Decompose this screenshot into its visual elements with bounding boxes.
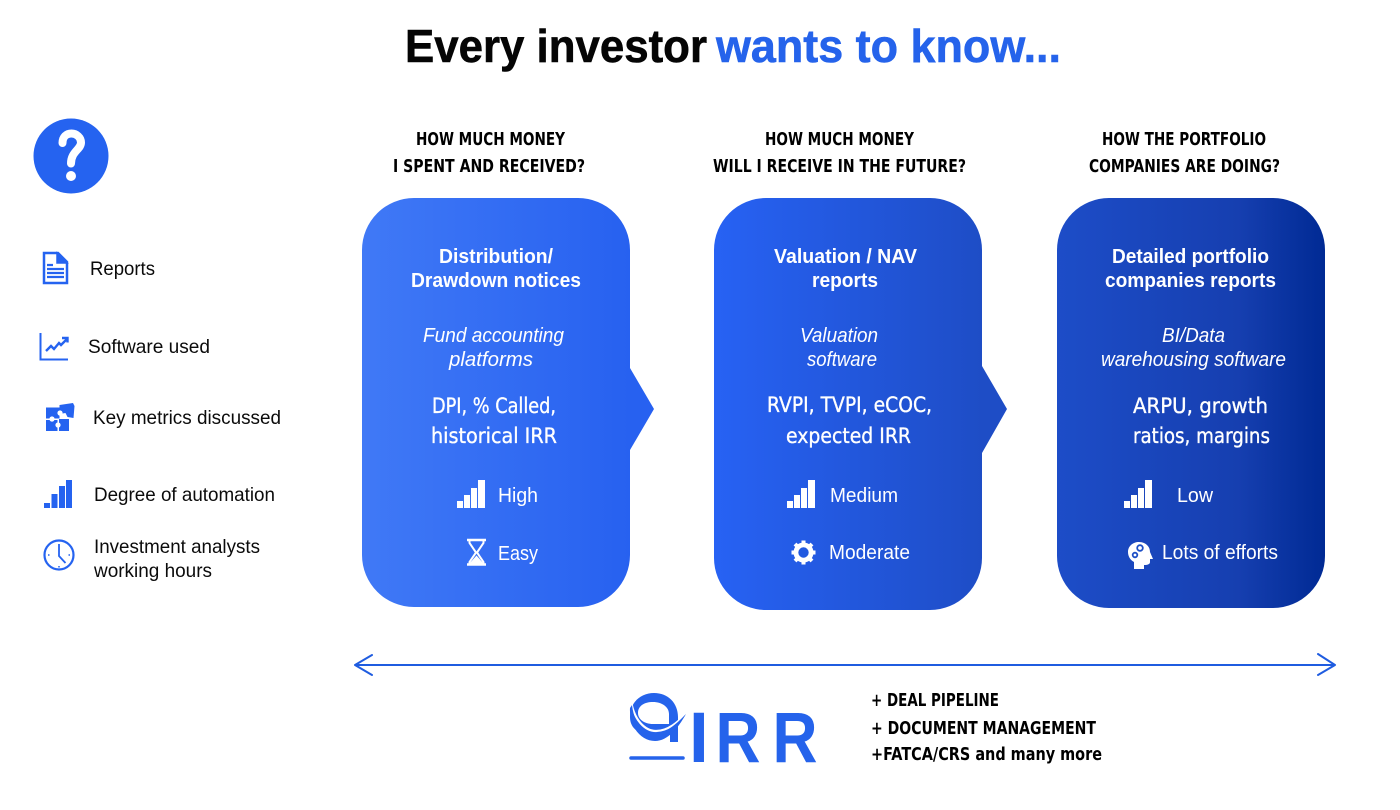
metrics xyxy=(1133,394,1270,448)
heading: reports xyxy=(812,270,878,292)
panel: portfolio companies reports xyxy=(1057,198,1325,608)
text block: additional features: +FATCA/CRS and many more xyxy=(871,744,1102,765)
legend: reports xyxy=(44,253,155,283)
question: future money: HOW MUCH MONEY xyxy=(765,130,914,150)
legend: investment analysts working hours xyxy=(44,536,260,582)
software xyxy=(1101,325,1286,371)
hours: lots of efforts: Lots of efforts xyxy=(1162,542,1278,564)
icon: question mark xyxy=(34,118,108,194)
legend panel xyxy=(34,118,281,582)
metrics: ratios, margins xyxy=(1133,424,1270,448)
question: money spent and received: I SPENT AND RECEIVED? xyxy=(393,157,585,177)
legend: degree of automation: Degree of automation xyxy=(94,484,275,506)
software: BI/Data xyxy=(1162,325,1225,347)
text block: additional features: + DEAL PIPELINE xyxy=(871,690,999,711)
metrics xyxy=(431,394,557,448)
legend: reports: Reports xyxy=(90,258,155,280)
question: future money xyxy=(713,130,966,177)
metrics: RVPI, TVPI, eCOC, xyxy=(767,393,932,417)
question: future money: WILL I RECEIVE IN THE FUTURE? xyxy=(713,157,966,177)
metrics: expected IRR xyxy=(786,424,911,448)
metrics: DPI, % Called, xyxy=(432,394,556,418)
automation: medium: Medium xyxy=(830,485,898,507)
automation: low xyxy=(1124,480,1214,508)
software: Fund accounting xyxy=(423,325,564,347)
title xyxy=(405,20,1061,72)
metrics xyxy=(767,393,932,448)
title: Every investor xyxy=(405,20,707,72)
heading: Valuation / NAV xyxy=(774,246,918,268)
question: portfolio companies xyxy=(1089,130,1280,177)
logo wordmark: R xyxy=(716,699,760,778)
automation: low: Low xyxy=(1177,485,1214,507)
heading xyxy=(1105,246,1276,292)
arrow: double-headed range xyxy=(355,654,1335,675)
logo wordmark xyxy=(689,699,818,778)
logo wordmark: R xyxy=(772,699,818,778)
logo wordmark: I xyxy=(689,699,709,778)
hours: moderate xyxy=(792,540,910,564)
automation: high xyxy=(457,480,538,508)
automation: medium xyxy=(787,480,898,508)
automation: high: High xyxy=(498,485,538,507)
question: money spent and received xyxy=(393,130,585,177)
heading xyxy=(411,246,581,292)
software: Valuation xyxy=(800,325,878,347)
legend: software used xyxy=(40,333,210,360)
heading: Drawdown notices xyxy=(411,270,581,292)
heading: Distribution/ xyxy=(439,246,553,268)
logo: QIRR xyxy=(630,693,818,778)
metrics: ARPU, growth xyxy=(1133,394,1268,418)
software xyxy=(423,325,564,371)
hours: lots of efforts xyxy=(1128,542,1278,569)
legend: degree of automation xyxy=(44,480,275,508)
question: portfolio companies: COMPANIES ARE DOING? xyxy=(1089,157,1280,177)
hours: easy xyxy=(467,540,538,565)
question: money spent and received: HOW MUCH MONEY xyxy=(416,130,565,150)
legend: key metrics discussed: Key metrics discussed xyxy=(93,407,281,429)
hours: moderate: Moderate xyxy=(829,542,910,564)
text block: additional features xyxy=(871,690,1102,765)
heading: Detailed portfolio xyxy=(1112,246,1269,268)
question: portfolio companies: HOW THE PORTFOLIO xyxy=(1102,130,1266,150)
panel: valuation reports xyxy=(714,198,1007,610)
software xyxy=(800,325,878,371)
title: wants to know... xyxy=(715,20,1061,72)
hours: easy: Easy xyxy=(498,543,538,565)
software: software xyxy=(807,349,877,371)
icon: logo ring xyxy=(630,693,687,758)
legend: key metrics discussed xyxy=(46,403,281,431)
text block: additional features: + DOCUMENT MANAGEMENT xyxy=(871,718,1097,739)
heading xyxy=(774,246,918,292)
legend: investment analysts working hours: working hours xyxy=(93,560,212,582)
legend: software used: Software used xyxy=(88,336,210,358)
software: warehousing software xyxy=(1101,349,1286,371)
software: platforms xyxy=(448,349,533,371)
heading: companies reports xyxy=(1105,270,1276,292)
metrics: historical IRR xyxy=(431,424,557,448)
legend: investment analysts working hours: Investment analysts xyxy=(94,536,260,558)
panel: distribution notices xyxy=(362,198,654,607)
